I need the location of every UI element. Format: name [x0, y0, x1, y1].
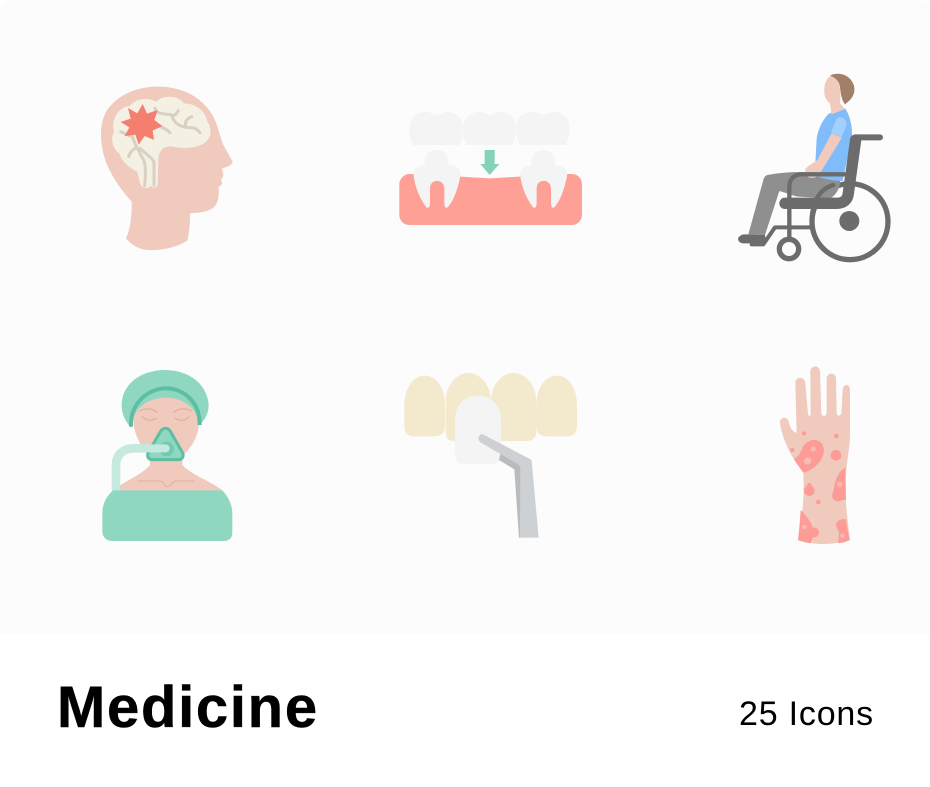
neck and face [824, 75, 845, 114]
oxygen tube [116, 448, 167, 490]
veneer [455, 396, 501, 464]
rear wheel [812, 184, 888, 260]
sleeve [831, 117, 847, 137]
shoulders and neck [112, 453, 223, 491]
icon: hand with skin rash [780, 366, 850, 544]
title: Medicine [57, 675, 319, 740]
right abutment tooth [520, 150, 567, 208]
rash highlights [802, 446, 845, 538]
rash patches [790, 431, 850, 543]
icon: person in wheelchair [738, 74, 888, 260]
icon: dental veneers with tweezers [404, 373, 577, 538]
teeth row [404, 373, 577, 441]
tweezers [499, 454, 522, 538]
icon: head with brain stroke [101, 87, 233, 250]
chair frame [752, 137, 880, 244]
arm [805, 133, 842, 178]
arrow [480, 150, 499, 175]
icon: patient with oxygen mask [102, 370, 232, 541]
left abutment tooth [413, 150, 461, 208]
icon count label: 25 Icons [739, 695, 874, 733]
mask [148, 428, 183, 460]
face [133, 393, 199, 461]
bridge crowns [409, 112, 569, 145]
collarbones [138, 481, 195, 487]
surgical cap [122, 370, 209, 427]
torso [815, 108, 852, 181]
hair [830, 74, 854, 104]
legs [748, 172, 840, 235]
gum [399, 174, 582, 225]
foot [738, 234, 765, 243]
hand and arm [780, 366, 850, 544]
icon: dental bridge [399, 112, 582, 225]
gown [102, 490, 232, 541]
closed eyes [140, 409, 191, 420]
